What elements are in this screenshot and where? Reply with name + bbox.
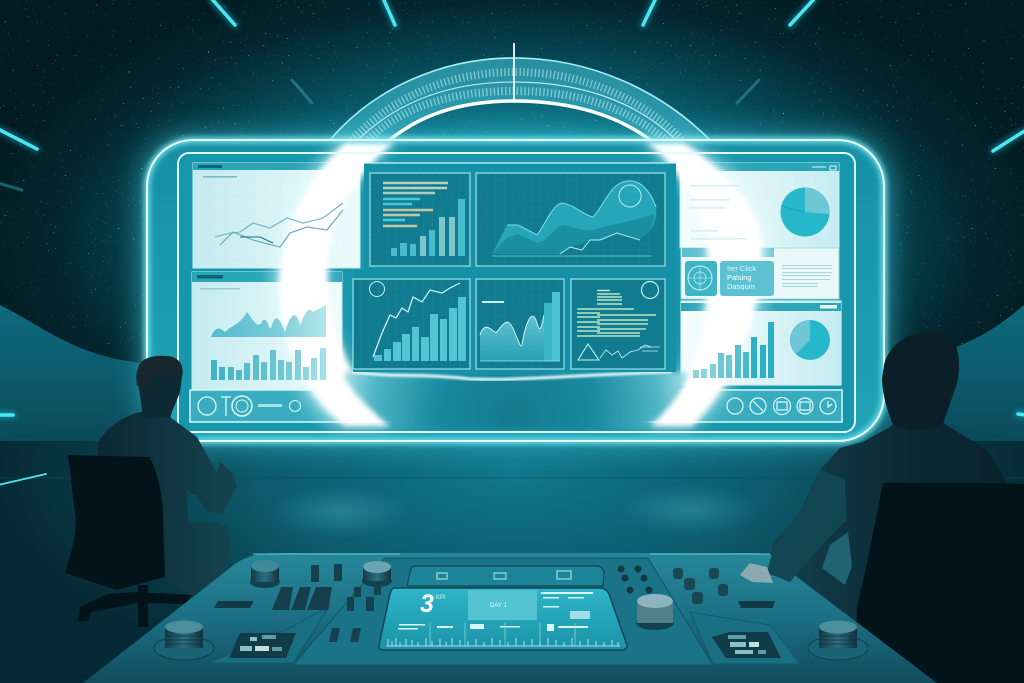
dial icon bbox=[642, 282, 658, 298]
switches: vertical sliders bbox=[311, 564, 381, 642]
keypad: left bbox=[229, 633, 296, 658]
hills: horizon landscape bbox=[0, 305, 1024, 445]
icons: bottom left bar bbox=[198, 396, 300, 416]
console: centre monitor display bbox=[379, 588, 627, 650]
chair: left bbox=[65, 455, 192, 627]
horizontal bars bbox=[383, 183, 448, 226]
torso and leg bbox=[98, 412, 237, 595]
console: centre monitor top strip bbox=[407, 566, 604, 586]
headline number: 3 bbox=[420, 590, 434, 618]
panel: list chart with warning icon bbox=[571, 279, 665, 369]
trend line bbox=[373, 283, 460, 357]
gauge icon bbox=[370, 282, 384, 296]
person: right operator arm and hand over the desk bbox=[740, 470, 847, 583]
knobs: small posts bbox=[673, 568, 728, 604]
knob: lower left stacked bbox=[154, 620, 214, 660]
chair: right bbox=[855, 483, 1024, 683]
status readout: Iter Click bbox=[727, 264, 756, 273]
list: top right panel text bbox=[690, 185, 746, 240]
charts: mid left area and bars bbox=[197, 275, 326, 380]
keys: fader block bbox=[272, 587, 332, 610]
panel: top right card bbox=[680, 163, 839, 248]
status readout bbox=[720, 261, 774, 296]
value badge bbox=[619, 185, 641, 207]
backing behind centre panels bbox=[353, 163, 676, 372]
header icons: top right panel bbox=[812, 166, 836, 170]
panel: top left card bbox=[193, 163, 360, 268]
bar chart: bottom right bbox=[693, 322, 774, 378]
panel: bottom right icon bar bbox=[600, 390, 842, 422]
knob: lower right stacked bbox=[808, 620, 868, 660]
panel: wave area chart bbox=[476, 279, 564, 369]
screen glow bbox=[140, 135, 890, 447]
knob: top centre bbox=[362, 561, 392, 587]
person: left operator bbox=[65, 356, 237, 627]
controls: right console knobs bbox=[618, 566, 868, 660]
wave area bbox=[480, 315, 544, 361]
vertical bars bbox=[391, 199, 465, 256]
panel: bottom left icon bar bbox=[190, 390, 520, 422]
glow: bright crescent ring bbox=[272, 142, 770, 428]
knob: top left bbox=[250, 560, 280, 588]
button: flat right bbox=[738, 601, 775, 608]
head bbox=[138, 356, 182, 418]
background: night sky bbox=[0, 0, 1024, 470]
glow: lower centre dome bbox=[344, 372, 687, 430]
controls: left console knobs bbox=[154, 560, 392, 660]
screen: frame lines drawn over the ring bbox=[147, 140, 884, 441]
knob: large centre right bbox=[636, 594, 674, 630]
keypad: right bbox=[712, 632, 781, 658]
light streaks: ceiling and wall lights bbox=[0, 0, 1024, 485]
line chart: top left three series bbox=[198, 165, 343, 247]
pie chart: bottom right bbox=[790, 320, 830, 360]
area chart bbox=[211, 305, 326, 337]
horizontal data lines bbox=[577, 290, 656, 336]
dial: arc above the screen bbox=[328, 43, 712, 144]
trend squiggle bbox=[600, 345, 651, 358]
panel: line and bar combo chart bbox=[353, 279, 470, 369]
icons: bottom right bar bbox=[727, 398, 836, 414]
person: right operator body bbox=[767, 330, 1024, 683]
panel: layered area chart bbox=[476, 173, 665, 266]
head bbox=[882, 330, 959, 429]
panel: mid right card bbox=[681, 248, 839, 299]
buttons: small round array bbox=[618, 566, 652, 594]
radar icon bbox=[685, 261, 717, 296]
panel: mid left card bbox=[192, 272, 342, 390]
console: desk body bbox=[83, 553, 937, 683]
panel: bottom right card bbox=[681, 301, 841, 385]
button: flat left bbox=[214, 601, 254, 608]
panel: horizontal and vertical bar chart bbox=[370, 173, 470, 266]
bar chart bbox=[211, 348, 326, 380]
console: centre monitor display: KPI bbox=[436, 595, 446, 601]
screen: outer frame fill bbox=[147, 140, 884, 441]
bars bbox=[374, 297, 466, 361]
warning triangle bbox=[578, 344, 599, 360]
area layers bbox=[492, 181, 656, 254]
pie chart: top right bbox=[780, 188, 830, 236]
screen: inner frame fill bbox=[178, 153, 855, 432]
console: centre monitor display: DAY 1 bbox=[490, 603, 507, 609]
seated leg highlight bbox=[822, 532, 852, 585]
status readout: Palsing bbox=[727, 273, 752, 282]
status readout: Dasqum bbox=[727, 282, 755, 291]
floor bbox=[0, 441, 1024, 683]
notes: mid right panel text bbox=[782, 265, 832, 287]
